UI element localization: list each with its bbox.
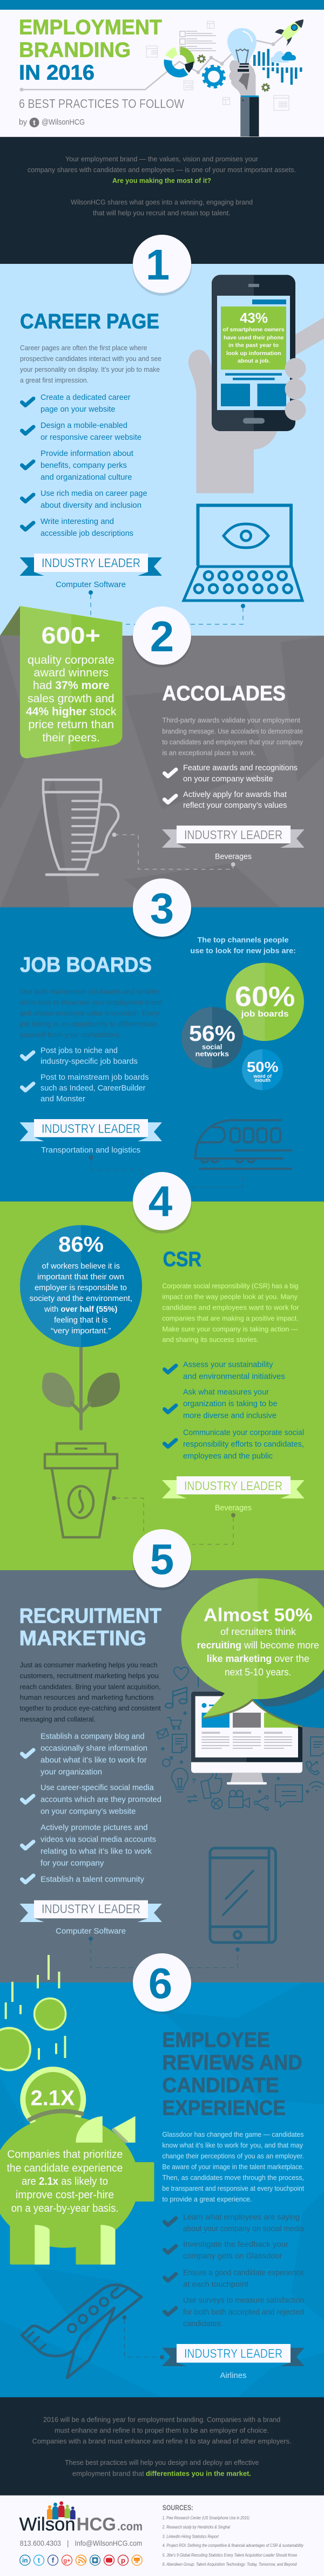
icon: rocket: [275, 19, 303, 46]
ribbon: industry leader: INDUSTRY LEADER: [42, 1902, 140, 1916]
conclusion text: must enhance and refine it to propel them to be an employer of choice.: [55, 2427, 269, 2435]
body text: [162, 2131, 304, 2203]
checklist: [164, 2212, 305, 2328]
chart: channels bubbles: [181, 963, 304, 1090]
heading: [19, 1605, 161, 1650]
intro text: that will help you recruit and retain top talent.: [93, 209, 231, 217]
bubble: 50% word of mouth: word of: [253, 1074, 272, 1079]
body text: [162, 1282, 299, 1344]
connector: [122, 2315, 164, 2359]
stat circle: 86%: 86%: [58, 1233, 104, 1257]
industry label: Beverages: [215, 1503, 252, 1512]
conclusion text: 2016 will be a defining year for employment branding. Companies with a brand: [43, 2416, 280, 2423]
heading: JOB BOARDS: [20, 953, 152, 977]
panel: header: [0, 0, 324, 137]
icon: desktop monitor: [191, 1692, 302, 1784]
body text: [19, 988, 162, 1039]
sources: 6. Aberdeen Group: Talent Acquisition Technology: Today, Tomorrow, and Beyond: [163, 2562, 297, 2567]
number badge 4: [132, 1172, 192, 1234]
heading: CANDIDATE: [162, 2074, 279, 2097]
industry label: Computer Software: [56, 580, 126, 589]
phone stat: of smartphone owners: [222, 326, 285, 333]
body text: Then, as candidates move through the process,: [162, 2174, 304, 2182]
social icons: t: [38, 2555, 40, 2564]
sources: 1. Pew Research Center (US Smartphone Use in 2015): [163, 2516, 249, 2520]
phone stat: have used their phone: [224, 335, 284, 341]
body text: [20, 344, 161, 384]
social icons: p: [121, 2557, 125, 2564]
checklist: Post to mainstream job boards: [40, 1073, 149, 1082]
icons: social marketing: ?: [192, 1777, 196, 1785]
intro text: WilsonHCG shares what goes into a winning, engaging brand: [71, 199, 253, 206]
stat circle: 86%: [20, 1225, 142, 1347]
heading: CSR: [163, 1248, 201, 1271]
bubble: 50% word of mouth: 50%: [247, 1059, 279, 1075]
body text: Be aware of your image in the talent marketplace.: [162, 2163, 304, 2171]
heading: REVIEWS AND: [162, 2051, 302, 2074]
bubble: 60% job boards: 60%: [235, 982, 295, 1013]
industry label: Transportation and logistics: [41, 1146, 140, 1155]
icon: clouds: [271, 51, 296, 63]
checklist: and Monster: [40, 1094, 85, 1103]
logo: WilsonHCG: .com: [117, 2519, 143, 2533]
intro text: company shares with candidates and employees — is one of your most important assets.: [28, 166, 296, 174]
checklist: about what it’s like to work for: [40, 1756, 147, 1765]
social icons: g+: [63, 2558, 71, 2564]
callout: 600+: price return than: [28, 718, 114, 731]
panel: footer: [0, 2495, 324, 2576]
panel: accolades: [0, 606, 324, 908]
bubble: 60% job boards: job boards: [240, 1010, 289, 1019]
checklist: Provide information about: [40, 449, 134, 458]
checklist: Actively apply for awards that: [183, 790, 287, 799]
checklist: Create a dedicated career: [40, 393, 131, 402]
connector: [89, 1937, 240, 1968]
callout: speech bubble: [181, 1578, 324, 1728]
number badge 2: [132, 606, 192, 667]
body text: Glassdoor has changed the game — candidates: [162, 2131, 303, 2138]
checklist: employees and the public: [183, 1451, 273, 1461]
checklist: for your company: [40, 1859, 104, 1868]
intro text: [28, 155, 296, 217]
number badge 1: 1: [146, 241, 170, 289]
checklist: more diverse and inclusive: [183, 1411, 276, 1420]
callout: 600+: 600+: [41, 623, 100, 649]
channels intro: [190, 935, 296, 955]
body text: companies that are making a positive impact.: [162, 1314, 299, 1322]
checklist: videos via social media accounts: [40, 1835, 156, 1844]
body text: to candidates and employees that your company: [162, 738, 303, 746]
logo: WilsonHCG: HCG: [77, 2514, 116, 2534]
byline: t: [33, 118, 36, 127]
number badge 5: 5: [150, 1535, 174, 1583]
panel: recruitment marketing: [0, 1529, 324, 1983]
body text: [162, 717, 303, 757]
body text: job listing is an opportunity to differentiate: [19, 1020, 157, 1028]
checklist: Feature awards and recognitions: [183, 764, 298, 773]
ribbon: industry leader: [19, 554, 162, 576]
checklist: Use surveys to measure satisfaction: [183, 2296, 304, 2305]
body text: Career pages are often the first place where: [20, 344, 147, 352]
connector: [112, 833, 235, 869]
ribbon: industry leader: INDUSTRY LEADER: [42, 556, 140, 570]
icon: tablet: [210, 1848, 275, 1943]
callout: speech bubble: recruiting will become more: [197, 1640, 319, 1651]
title: [19, 16, 162, 84]
number badge 5: [132, 1529, 192, 1590]
checklist: Use rich media on career page: [40, 489, 147, 498]
icon: coffee cup: [45, 1443, 117, 1537]
panel: employee reviews and candidate experience: [0, 1953, 324, 2397]
body text: a great first impression.: [20, 377, 89, 384]
number badge 3: 3: [150, 884, 174, 932]
body text: change their perceptions of you as an employer.: [162, 2152, 304, 2160]
checklist: Actively promote pictures and: [40, 1823, 148, 1832]
title: BRANDING: [19, 38, 131, 62]
contact details: [20, 2539, 142, 2547]
phone stat: in the past year to: [228, 342, 279, 349]
checklist: page on your website: [40, 405, 116, 414]
stat circle: 86%: employer is responsible to: [35, 1284, 127, 1292]
channels intro: The top channels people: [198, 935, 289, 944]
panel: conclusion: [0, 2397, 324, 2496]
icons: social marketing: [157, 1667, 324, 1810]
heading: [162, 2028, 302, 2120]
industry label: Computer Software: [56, 1926, 126, 1936]
body text: and unique employee value proposition. Every: [20, 1010, 160, 1017]
callout: 600+: 44% higher stock: [26, 705, 117, 718]
body text: Just as consumer marketing helps you reach: [20, 1661, 158, 1669]
icon: checklist: [180, 31, 216, 52]
intro text: Are you making the most of it?: [112, 177, 211, 185]
checklist: [22, 1046, 149, 1103]
industry label: Beverages: [215, 852, 252, 861]
stem and leaves: [42, 1347, 120, 1429]
stat coin: 2.1X: [23, 2069, 83, 2130]
number badge 6: 6: [148, 1959, 172, 2007]
byline: @WilsonHCG: [42, 118, 85, 127]
connector: [89, 1155, 243, 1187]
heading: EXPERIENCE: [162, 2096, 286, 2120]
heading: RECRUITMENT: [19, 1605, 161, 1628]
piggy text: the candidate experience: [7, 2162, 123, 2174]
sources: 5. Jibe’s 9 Global Recruiting Statistics Every Talent Acquisition Leader Should Know: [163, 2553, 298, 2558]
body text: [20, 1661, 161, 1723]
bubble: 56% social networks: [181, 1006, 244, 1069]
number badge 2: 2: [150, 612, 174, 660]
body text: Corporate social responsibility (CSR) has a big: [162, 1282, 299, 1290]
checklist: occasionally share information: [40, 1744, 147, 1753]
industry label: Airlines: [220, 2371, 246, 2380]
bubble: 50% word of mouth: [242, 1049, 283, 1090]
stat circle: 86%: feeling that it is: [54, 1316, 107, 1325]
contact details: 813.600.4303: [20, 2539, 61, 2547]
heading: CAREER PAGE: [20, 310, 159, 333]
icon: train: [195, 1120, 292, 1169]
body text: know what it’s like to work for you, and that may: [162, 2142, 303, 2149]
conclusion text: Companies with a brand must enhance and refine it to stay ahead of other employers.: [32, 2437, 291, 2445]
ribbon: industry leader: [19, 1119, 162, 1141]
checklist: at each touchpoint: [183, 2280, 249, 2289]
body text: impact on the way people look at you. Many: [162, 1293, 298, 1301]
checklist: Design a mobile-enabled: [40, 421, 127, 430]
piggy text: Companies that prioritize: [7, 2149, 123, 2161]
body text: niche sites to showcase your employment brand: [20, 999, 162, 1006]
checklist: responsibility efforts to candidates,: [183, 1440, 304, 1449]
body text: branding message. Use accolades to demonstrate: [162, 727, 303, 735]
contact details: |: [67, 2539, 69, 2547]
checklist: Communicate your corporate social: [183, 1428, 304, 1437]
body text: Make sure your company is taking action —: [162, 1325, 299, 1333]
checklist: such as Indeed, CareerBuilder: [40, 1083, 145, 1093]
piggy text: [7, 2149, 123, 2214]
logo: WilsonHCG: [19, 2502, 143, 2534]
heading: ACCOLADES: [162, 682, 286, 705]
ribbon: industry leader: [162, 1476, 305, 1498]
callout: 600+: their peers.: [42, 731, 100, 744]
body text: be transparent and responsive at every touchpoint: [162, 2185, 304, 2192]
checklist: [22, 1732, 161, 1884]
body text: together to produce eye-catching and consistent: [20, 1705, 161, 1712]
panel: job boards: [0, 878, 324, 1201]
social icons: [20, 2555, 142, 2565]
stat circle: 86%: “very important.”: [51, 1327, 111, 1335]
checklist: candidates: [183, 2319, 221, 2328]
bubble: 56% social networks: networks: [195, 1050, 229, 1058]
checklist: [164, 1360, 304, 1461]
conclusion text: [32, 2416, 291, 2477]
checklist: or responsive career website: [40, 433, 141, 442]
social icons: f: [52, 2555, 55, 2564]
icon: laptop with eye: [184, 505, 302, 601]
callout: speech bubble: Almost 50%: [204, 1605, 313, 1625]
callout: 600+: award winners: [33, 666, 109, 679]
callout: 600+: sales growth and: [28, 692, 114, 705]
body text: yourself from your competitors.: [20, 1031, 122, 1039]
checklist: Write interesting and: [40, 517, 114, 526]
phone stat: look up information: [226, 350, 281, 357]
panel: career page: [0, 235, 324, 636]
callout: speech bubble: like marketing over the: [207, 1653, 309, 1664]
sources: 2. Research study by Hendricks & Singhal: [162, 2525, 230, 2530]
checklist: [22, 393, 147, 538]
byline: [19, 118, 85, 127]
icons: browser windows: [146, 22, 289, 110]
ribbon: industry leader: INDUSTRY LEADER: [184, 2346, 282, 2360]
conclusion text: These best practices will help you design and deploy an effective: [65, 2459, 259, 2466]
checklist: Establish a talent community: [40, 1875, 145, 1884]
piggy bank: [0, 2111, 154, 2265]
body text: to provide a great experience.: [162, 2196, 252, 2203]
checklist: relating to what it’s like to work: [40, 1847, 152, 1856]
checklist: industry-specific job boards: [40, 1057, 138, 1066]
sources: 3. LinkedIn Hiring Statistics Report: [163, 2534, 219, 2539]
title: IN 2016: [19, 61, 94, 84]
icon: light bulb in hand: [227, 28, 259, 137]
bubble: 56% social networks: social: [202, 1043, 222, 1051]
phone stat: about a job.: [238, 358, 270, 364]
checklist: on your company’s website: [40, 1807, 136, 1816]
checklist: Assess your sustainability: [183, 1360, 273, 1369]
connector: [112, 1496, 235, 1544]
logo: WilsonHCG: Wilson: [19, 2514, 76, 2534]
checklist: and environmental initiatives: [183, 1372, 285, 1381]
body text: your personality on display. It’s your job to make: [20, 366, 160, 373]
checklist: Use career-specific social media: [40, 1783, 154, 1793]
panel: csr: [0, 1172, 324, 1571]
panel: intro: [0, 137, 324, 264]
piggy text: are 2.1x as likely to: [22, 2176, 108, 2187]
contact details: Info@WilsonHCG.com: [75, 2539, 142, 2547]
conclusion text: differentiates you in the market.: [146, 2470, 251, 2477]
checklist: organization is taking to be: [183, 1399, 278, 1408]
checklist: and organizational culture: [40, 473, 132, 482]
checklist: Learn what employees are saying: [183, 2212, 300, 2221]
checklist: [164, 764, 298, 810]
checklist: Ask what measures your: [183, 1387, 269, 1396]
phone stat: 43%: [240, 310, 268, 326]
social icons: in: [22, 2557, 28, 2564]
ribbon: industry leader: [162, 826, 305, 848]
body text: Third-party awards validate your employment: [162, 717, 301, 724]
ribbon: industry leader: [19, 1900, 162, 1922]
checklist: your organization: [40, 1768, 102, 1777]
piggy text: improve cost-per-hire: [16, 2189, 114, 2201]
body text: and sharing its success stories.: [162, 1336, 259, 1344]
callout: 600+: quality corporate: [28, 653, 114, 666]
title: EMPLOYMENT: [19, 16, 162, 39]
piggy text: on a year-by-year basis.: [11, 2203, 119, 2214]
byline: by: [19, 118, 27, 127]
phone stat: [222, 310, 285, 364]
body text: messaging and collateral.: [20, 1716, 96, 1723]
icon: coffee mug: [43, 780, 118, 875]
number badge 6: [132, 1953, 192, 2014]
ribbon: industry leader: [162, 2344, 305, 2366]
stat circle: 86%: of workers believe it is: [42, 1262, 120, 1271]
stat circle: 86%: important that their own: [37, 1273, 124, 1282]
connector: [89, 590, 245, 624]
ribbon: industry leader: INDUSTRY LEADER: [42, 1121, 140, 1135]
checklist: about your company on social media: [183, 2224, 305, 2233]
sources: [162, 2504, 304, 2567]
checklist: reflect your company’s values: [183, 801, 287, 810]
icon: gears: [198, 55, 269, 91]
body text: human resources and marketing functions: [20, 1694, 154, 1701]
callout: speech bubble: of recruiters think: [220, 1626, 296, 1637]
checklist: accessible job descriptions: [40, 529, 133, 538]
number badge 1: [132, 235, 192, 296]
body text: is an exceptional place to work.: [162, 749, 256, 757]
growth line: [19, 36, 283, 92]
checklist: company gets on Glassdoor: [183, 2252, 282, 2261]
checklist: Post jobs to niche and: [40, 1046, 118, 1055]
heading: MARKETING: [19, 1627, 146, 1650]
heading: EMPLOYEE: [162, 2028, 270, 2052]
chart: donut: [168, 51, 194, 73]
icon: airplane: [22, 2285, 141, 2378]
body text: prospective candidates interact with you and see: [20, 355, 161, 363]
icon: bars: [253, 49, 302, 85]
checklist: Investigate the feedback your: [183, 2240, 288, 2249]
number badge 4: 4: [148, 1177, 173, 1225]
bubble: 56% social networks: 56%: [189, 1021, 235, 1046]
icon: hand holding phone: [188, 275, 324, 493]
subtitle: 6 BEST PRACTICES TO FOLLOW: [19, 97, 184, 111]
callout: speech bubble: next 5-10 years.: [225, 1667, 292, 1678]
conclusion text: employment brand that: [72, 2470, 144, 2477]
stat circle: 86%: society and the environment,: [30, 1294, 132, 1303]
number badge 3: [132, 878, 192, 939]
callout: 600+: had 37% more: [33, 679, 109, 692]
bubble: 50% word of mouth: mouth: [254, 1078, 271, 1083]
callout: 600+: [0, 606, 122, 758]
body text: candidates and employees want to work for: [162, 1304, 299, 1311]
bubble: 60% job boards: [226, 963, 304, 1041]
intro text: Your employment brand — the values, vision and promises your: [65, 155, 258, 163]
plant with stat: [20, 1225, 142, 1537]
channels intro: use to look for new jobs are:: [190, 946, 296, 955]
ribbon: industry leader: INDUSTRY LEADER: [184, 828, 282, 842]
checklist: accounts which are they promoted: [40, 1795, 161, 1804]
checklist: benefits, company perks: [40, 461, 127, 470]
checklist: Ensure a good candidate experience: [183, 2268, 304, 2277]
sources: SOURCES:: [163, 2504, 193, 2512]
ribbon: industry leader: INDUSTRY LEADER: [184, 1478, 282, 1493]
checklist: on your company website: [183, 774, 273, 783]
checklist: for both both accepted and rejected: [183, 2308, 304, 2317]
icon: falling coins: [0, 1955, 83, 2130]
stat circle: 86%: with over half (55%): [44, 1305, 118, 1314]
stat coin: 2.1X: 2.1X: [31, 2087, 75, 2110]
checklist: Establish a company blog and: [40, 1732, 145, 1741]
checklist: about diversity and inclusion: [40, 501, 141, 510]
body text: customers, recruitment marketing helps you: [20, 1672, 159, 1680]
body text: reach candidates. Bring your talent acquisition,: [20, 1683, 161, 1691]
body text: Use both mainstream job boards and smaller,: [20, 988, 161, 996]
